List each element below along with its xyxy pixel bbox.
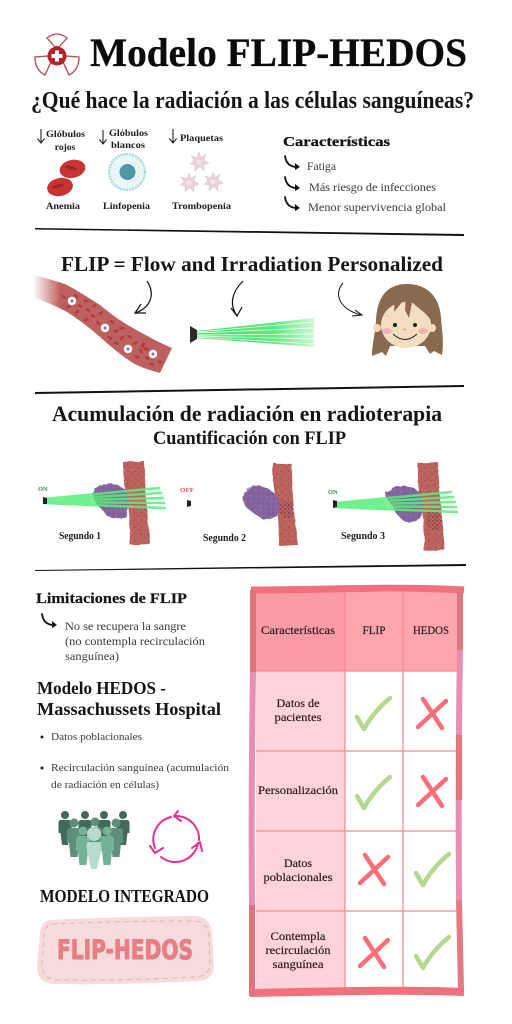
source — [43, 497, 47, 504]
anemia label: Anemia — [46, 202, 80, 212]
state label on: ON — [38, 486, 48, 493]
plaquetas label — [169, 129, 223, 144]
row: datos poblacionales: poblacionales — [264, 870, 333, 884]
panel: blood cells — [37, 129, 231, 212]
panel: segundo 3 — [328, 462, 457, 551]
glóbulos rojos label — [37, 129, 85, 153]
heading: modelo HEDOS: Modelo HEDOS - — [37, 678, 166, 698]
trombopenia label: Trombopenia — [172, 202, 231, 212]
badge: FLIP-HEDOS — [37, 916, 214, 984]
icon: platelets — [180, 152, 223, 192]
icon: radiation hospital logo — [35, 34, 79, 75]
glóbulos rojos label: rojos — [55, 143, 76, 153]
source — [333, 500, 337, 508]
text block: limitation — [42, 614, 205, 663]
tumor — [93, 484, 130, 518]
row: datos de pacientes — [274, 696, 446, 729]
heading: modelo HEDOS — [37, 678, 221, 719]
vessel — [418, 462, 445, 551]
glóbulos rojos label: Glóbulos — [46, 130, 85, 140]
heading: modelo integrado: MODELO INTEGRADO — [40, 886, 209, 906]
item: infecciones — [285, 177, 437, 194]
text block: limitation: (no contempla recirculación — [65, 636, 205, 648]
tumor — [242, 486, 280, 519]
list: HEDOS features: Datos poblacionales — [51, 731, 142, 743]
item: infecciones: Más riesgo de infecciones — [309, 182, 437, 194]
panel: segundo 2 — [180, 463, 298, 546]
item: fatiga: Fatiga — [307, 161, 336, 173]
brushed border — [250, 588, 464, 996]
vessel — [273, 463, 298, 546]
state label off: OFF — [180, 487, 194, 494]
heading: FLIP definition: FLIP = Flow and Irradiation Personalized — [61, 252, 443, 276]
plaquetas label: Plaquetas — [180, 134, 223, 144]
icon: white blood cell — [109, 154, 145, 190]
row: personalización — [258, 777, 446, 808]
icon: population — [58, 811, 130, 869]
time label: Segundo 1 — [59, 531, 101, 542]
row: datos poblacionales: Datos — [284, 856, 312, 870]
item: supervivencia: Menor supervivencia global — [308, 202, 446, 214]
table fills — [256, 592, 457, 990]
vessel — [123, 461, 150, 545]
row: recirculación: Contempla — [270, 929, 326, 943]
heading: radiation accumulation: Acumulación de radiación en radioterapia — [52, 401, 442, 426]
row: datos poblacionales — [264, 854, 449, 885]
arrow: to vessel — [135, 281, 151, 313]
text block: limitation: No se recupera la sangre — [65, 621, 186, 633]
panel: características list — [283, 135, 446, 214]
time label: Segundo 2 — [203, 533, 246, 544]
panel: segundo 1 — [38, 461, 165, 545]
table: comparison — [250, 588, 464, 996]
illustration: radiation beam source — [190, 318, 314, 347]
header row: Características — [261, 623, 335, 637]
heading: limitaciones: Limitaciones de FLIP — [36, 591, 187, 607]
text block: limitation: sanguínea) — [65, 651, 119, 663]
row: datos de pacientes: pacientes — [274, 710, 322, 724]
heading: modelo HEDOS: Massachussets Hospital — [37, 699, 221, 719]
heading: radiation question: ¿Qué hace la radiación a las células sanguíneas? — [31, 88, 474, 114]
header row — [261, 623, 449, 637]
heading: características: Características — [283, 135, 391, 150]
beam — [336, 492, 457, 512]
source — [187, 500, 191, 507]
glóbulos blancos label — [99, 129, 148, 151]
row: recirculación: sanguínea — [272, 957, 324, 971]
item: fatiga — [285, 156, 336, 173]
item: supervivencia — [285, 197, 446, 214]
beam — [44, 488, 165, 508]
arrow: to patient — [339, 283, 362, 316]
illustration: blood vessel — [33, 275, 172, 373]
glóbulos blancos label: blancos — [111, 141, 145, 151]
subheading: quantification: Cuantificación con FLIP — [153, 428, 346, 449]
row: datos de pacientes: Datos de — [276, 696, 320, 710]
header row: FLIP — [362, 623, 386, 637]
time label: Segundo 3 — [341, 531, 385, 542]
row: personalización: Personalización — [258, 783, 338, 797]
header row: HEDOS — [413, 623, 449, 637]
arrow: to beam — [231, 281, 243, 316]
glóbulos blancos label: Glóbulos — [109, 129, 148, 139]
linfopenia label: Linfopenia — [103, 202, 150, 212]
icon: red blood cells — [45, 157, 87, 199]
icon: recirculation arrows — [150, 811, 202, 862]
list: HEDOS features — [40, 731, 230, 791]
dark damaged area — [426, 510, 442, 530]
list: HEDOS features: Recirculación sanguínea (acumulación — [51, 762, 230, 774]
list: HEDOS features: de radiación en células) — [51, 779, 159, 791]
tumor — [386, 486, 424, 522]
row: recirculación — [266, 929, 449, 971]
grid — [256, 592, 457, 990]
illustration: patient face — [372, 284, 443, 356]
title: Modelo FLIP-HEDOS — [90, 30, 467, 75]
badge: FLIP-HEDOS: FLIP-HEDOS — [57, 935, 193, 966]
dark damaged area — [279, 501, 295, 519]
state label on: ON — [328, 489, 338, 496]
row: recirculación: recirculación — [266, 943, 330, 957]
